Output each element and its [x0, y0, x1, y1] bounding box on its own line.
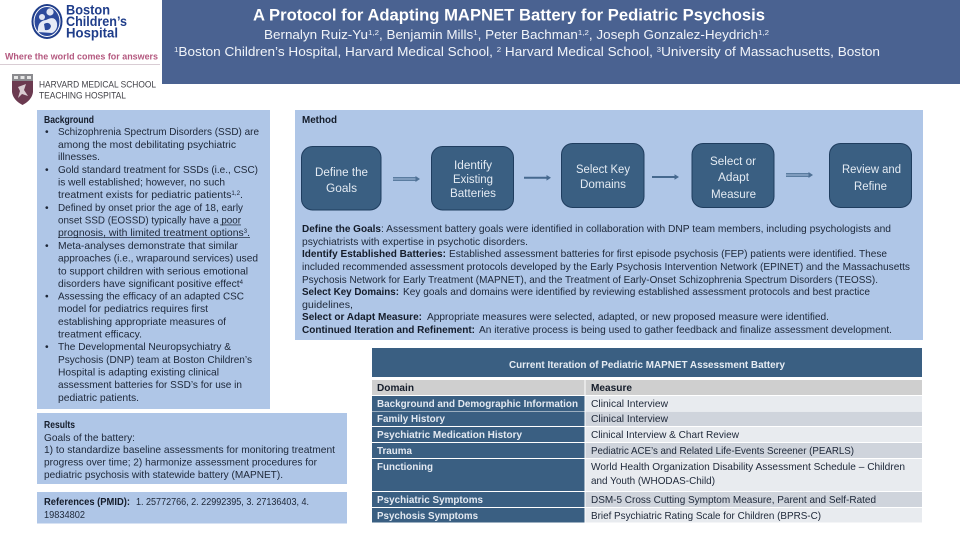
row: functioning: Functioning	[377, 462, 433, 473]
bullet: early onset definition: Defined by onset prior the age of 18, early	[58, 203, 244, 214]
description: select key domains	[302, 287, 870, 311]
row: psychiatric symptoms: DSM-5 Cross Cutting Symptom Measure, Parent and Self-Rated	[591, 495, 876, 506]
description: select or adapt measure: Appropriate measures were selected, adapted, or new proposed measure were identified.	[427, 312, 829, 323]
arrow: select domains to select measure	[652, 174, 679, 180]
row: trauma: Trauma	[377, 446, 412, 457]
row: family history: Clinical Interview	[591, 414, 669, 425]
row: psychiatric symptoms: Psychiatric Symptoms	[377, 495, 483, 506]
table title	[372, 348, 922, 377]
step: select or adapt measure: Measure	[711, 187, 756, 201]
row: psychosis symptoms: Psychosis Symptoms	[377, 511, 478, 522]
bullet: gold standard treatment: •	[45, 165, 49, 176]
step: select key domains: Domains	[580, 177, 626, 191]
step: select key domains	[562, 144, 644, 208]
bullet: gold standard treatment: Gold standard treatment for SSDs (i.e., CSC)	[58, 165, 258, 176]
description: identify established batteries: Established assessment batteries for first episode psychosis (FEP) patients were identified. These	[449, 249, 887, 260]
step: select or adapt measure	[692, 144, 774, 208]
bullet: meta-analyses: to support children with serious emotional	[58, 266, 248, 278]
description: define the goals: Define the Goals	[302, 224, 381, 235]
bullet: early onset definition: 3	[244, 229, 248, 235]
bullet: DNP team: •	[45, 342, 49, 353]
affiliations: 3	[657, 45, 661, 54]
bullet: early onset definition: onset SSD (EOSSD) typically have a poor	[58, 216, 242, 226]
title: A Protocol for Adapting MAPNET Battery for Pediatric Psychosis	[253, 6, 765, 24]
icon: Harvard shield	[12, 74, 33, 105]
results text: pediatric psychosis with statewide battery (MAPNET).	[44, 470, 283, 481]
bullet: assessing efficacy: •	[45, 292, 49, 302]
description: continued iteration: Continued Iteration and Refinement:	[302, 325, 475, 336]
panel: references	[37, 492, 347, 524]
logo: Boston Children's Hospital: Boston	[66, 3, 110, 18]
row: psychosis symptoms	[372, 508, 922, 522]
bullet: assessing efficacy	[45, 292, 245, 340]
description: identify established batteries	[302, 249, 910, 286]
bullet: early onset definition: .	[247, 228, 250, 239]
bullet: DNP team: pediatric patients.	[58, 393, 139, 404]
row: background and demographic: Background and Demographic Information	[377, 399, 578, 410]
bullet: DNP team: The Developmental Neuropsychiatry &	[58, 342, 231, 353]
bullet: meta-analyses: disorders have significant positive effect	[58, 279, 240, 290]
step: review and refine: Review and	[842, 162, 901, 176]
step: identify existing batteries: Batteries	[450, 186, 496, 200]
results text: Goals of the battery:	[44, 433, 135, 444]
logo: Boston Children's Hospital: Hospital	[66, 25, 118, 40]
bullet: meta-analyses: approaches (i.e., wraparound services) used	[58, 254, 258, 264]
description: define the goals: : Assessment battery goals were identified in collaboration with DNP team members, including psychologists and	[381, 224, 891, 235]
bullet: schizophrenia spectrum disorders: Schizophrenia Spectrum Disorders (SSD) are	[58, 127, 259, 138]
authors: Bernalyn Ruiz-Yu	[264, 27, 363, 42]
description: continued iteration: An iterative process is being used to gather feedback and finalize assessment development.	[479, 325, 892, 336]
row: functioning	[372, 459, 922, 491]
description: define the goals: psychiatrists with expertise in psychotic disorders.	[302, 237, 528, 248]
bullet: meta-analyses	[45, 241, 258, 290]
arrow: define to identify	[393, 176, 420, 182]
affiliations: Boston Children’s Hospital, Harvard Medical School,	[178, 44, 497, 59]
bullet: schizophrenia spectrum disorders: among the most debilitating psychiatric	[58, 140, 236, 151]
table header row: Domain	[377, 383, 414, 394]
row: background and demographic: Clinical Interview	[591, 399, 669, 410]
description: identify established batteries: Identify Established Batteries:	[302, 249, 446, 260]
heading: method: Method	[302, 115, 337, 126]
step: select or adapt measure: Adapt	[718, 170, 750, 184]
row: functioning: World Health Organization Disability Assessment Schedule – Children	[591, 462, 905, 473]
description: select key domains: Select Key Domains:	[302, 287, 399, 298]
bullet: gold standard treatment: .	[240, 190, 243, 201]
step: select key domains: Select Key	[576, 162, 631, 176]
row: psychosis symptoms: Brief Psychiatric Rating Scale for Children (BPRS-C)	[591, 511, 821, 522]
description: continued iteration	[302, 325, 892, 336]
bullet: schizophrenia spectrum disorders: •	[45, 127, 49, 138]
authors: 1,2	[578, 28, 589, 37]
step: identify existing batteries: Existing	[453, 172, 493, 186]
table header row: Measure	[591, 383, 632, 394]
bullet: schizophrenia spectrum disorders: illnesses.	[58, 152, 100, 163]
row: family history: Family History	[377, 414, 445, 425]
step: select or adapt measure: Select or	[710, 154, 756, 168]
step: identify existing batteries	[432, 146, 514, 210]
row: psychiatric medication history	[372, 427, 922, 442]
authors: 1,2	[758, 28, 769, 37]
affiliations: 1	[174, 45, 178, 54]
table title: Current Iteration of Pediatric MAPNET Assessment Battery	[509, 360, 785, 371]
bullet: schizophrenia spectrum disorders	[45, 127, 259, 163]
row: family history	[372, 412, 922, 426]
step: define the goals: Define the	[315, 165, 368, 179]
bullet: meta-analyses: •	[45, 241, 49, 252]
bullet: DNP team: Psychosis (DNP) team at Boston Children’s	[58, 355, 252, 366]
bullet: early onset definition: •	[45, 203, 49, 214]
bullet: DNP team: assessment batteries for SSD’s for use in	[58, 380, 242, 391]
affiliations: University of Massachusetts, Boston	[661, 44, 880, 59]
panel: references: References (PMID):	[44, 497, 130, 508]
authors: , Peter Bachman	[478, 27, 578, 42]
authors: 1	[473, 28, 478, 37]
bullet: assessing efficacy: treatment efficacy.	[58, 330, 142, 340]
bullet: DNP team: Hospital is adapting existing clinical	[58, 368, 219, 378]
description: identify established batteries: Psychosis Network for Early Treatment (MAPNET), and the Treatment of Early-Onset Schizophrenia Spectrum Disorders (TEOSS).	[302, 275, 878, 286]
description: identify established batteries: included recommended assessment protocols developed by the Early Psychosis Intervention Network (EPINET) and the Massachusetts	[302, 262, 910, 273]
bullet: meta-analyses: 4	[240, 280, 244, 286]
bullet: gold standard treatment	[45, 165, 258, 201]
authors: , Joseph Gonzalez-Heydrich	[589, 27, 758, 42]
bullet: gold standard treatment: 1,2	[231, 191, 241, 197]
results text: 1) to standardize baseline assessments for monitoring treatment	[44, 445, 335, 456]
bullet: assessing efficacy: establishing appropriate measures of	[58, 317, 226, 328]
heading: background: Background	[44, 115, 94, 126]
bullet: assessing efficacy: model for pediatrics requires first	[58, 304, 208, 315]
bullet: DNP team	[45, 342, 252, 404]
affiliations: 2	[497, 45, 501, 54]
bullet: early onset definition: prognosis, with limited treatment options	[58, 228, 242, 239]
row: functioning: and Youth (WHODAS-Child)	[591, 476, 715, 487]
logo: Boston Children's Hospital	[5, 3, 158, 61]
panel: results	[37, 413, 347, 484]
method descriptions	[302, 224, 910, 336]
bullet: meta-analyses: Meta-analyses demonstrate that similar	[58, 241, 239, 252]
table header row	[372, 380, 922, 395]
authors: , Benjamin Mills	[379, 27, 473, 42]
icon: mother and child seal	[32, 4, 62, 39]
header banner	[162, 0, 960, 84]
row: psychiatric medication history: Psychiatric Medication History	[377, 430, 522, 441]
row: trauma	[372, 443, 922, 458]
panel: references: 1. 25772766, 2. 22992395, 3. 27136403, 4.	[136, 497, 309, 508]
results text	[44, 433, 335, 481]
bullet: early onset definition	[45, 203, 250, 239]
arrow: identify to select domains	[524, 175, 551, 181]
bullet: gold standard treatment: is well established; however, no such	[58, 178, 225, 188]
authors: 1,2	[368, 28, 379, 37]
row: psychiatric medication history: Clinical Interview & Chart Review	[591, 430, 740, 441]
logo: Boston Children's Hospital: Children’s	[66, 14, 127, 29]
table: assessment battery	[372, 348, 922, 522]
heading: results: Results	[44, 420, 75, 431]
description: select or adapt measure: Select or Adapt Measure:	[302, 312, 422, 323]
panel: background	[37, 110, 270, 409]
logo: Harvard Medical School Teaching Hospital: TEACHING HOSPITAL	[39, 90, 126, 102]
results text: progress over time; 2) harmonize assessment procedures for	[44, 458, 318, 468]
step: identify existing batteries: Identify	[454, 158, 493, 172]
step: review and refine	[830, 144, 912, 208]
step: review and refine: Refine	[854, 179, 887, 193]
row: background and demographic	[372, 396, 922, 411]
step: define the goals	[302, 146, 381, 210]
panel: references: 19834802	[44, 510, 85, 521]
arrow: select measure to review	[786, 172, 813, 178]
description: define the goals	[302, 224, 891, 248]
row: psychiatric symptoms	[372, 492, 922, 507]
description: select key domains: guidelines,	[302, 300, 353, 311]
bullet: gold standard treatment: treatment exists for pediatric patients	[58, 190, 226, 201]
logo: Harvard Medical School Teaching Hospital: HARVARD MEDICAL SCHOOL	[39, 80, 156, 90]
logo: Boston Children's Hospital: Where the world comes for answers	[5, 52, 158, 62]
row: trauma: Pediatric ACE’s and Related Life-Events Screener (PEARLS)	[591, 446, 854, 457]
logo: Harvard Medical School Teaching Hospital	[12, 74, 156, 105]
bullet: assessing efficacy: Assessing the efficacy of an adapted CSC	[58, 292, 245, 302]
step: define the goals: Goals	[326, 181, 357, 195]
description: select key domains: Key goals and domains were identified by reviewing established assessment protocols and best practice	[403, 287, 870, 298]
affiliations: Harvard Medical School,	[501, 44, 657, 59]
panel: method	[295, 110, 923, 340]
